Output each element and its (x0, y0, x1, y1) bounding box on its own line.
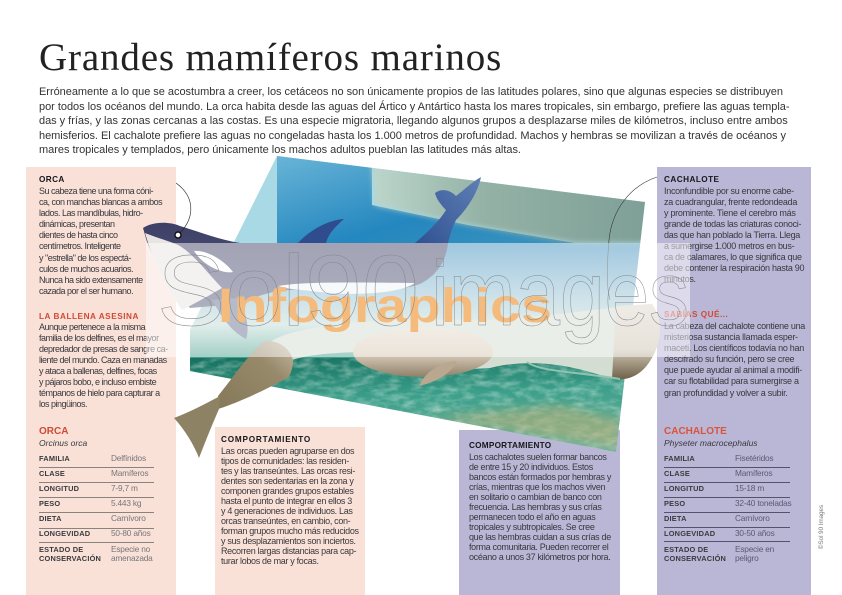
title: Grandes mamíferos marinos (39, 36, 502, 79)
fact table: cachalote: ESTADO DE (664, 545, 708, 554)
text: orca: centímetros. Inteligente (39, 241, 121, 251)
cachalote description (664, 175, 804, 284)
fact table: orca: DIETA (39, 514, 62, 523)
text: orca: cazada por el ser humano. (39, 286, 133, 296)
text: cachalote: ca de calamares, lo que significa que (664, 252, 802, 262)
text: comportamiento cachalote: crías, mientras que los machos viven (469, 482, 605, 492)
whale lower jaw (527, 362, 620, 379)
text: cachalote: minutos. (664, 274, 696, 284)
heading: la ballena asesina: LA BALLENA ASESINA (39, 312, 139, 321)
fact table: cachalote: LONGEVIDAD (664, 529, 715, 538)
text: sabías que: misteriosa sustancia llamada esper- (664, 332, 798, 342)
fact table: orca: Mamíferos (111, 468, 148, 478)
text: sabías que: gran profundidad y volver a subir. (664, 388, 788, 398)
whale flukes (174, 396, 220, 458)
text: la ballena asesina: los pingüinos. (39, 399, 87, 409)
connector: cachalote (607, 177, 657, 300)
fact table: cachalote: 30-50 años (735, 528, 775, 538)
text: la ballena asesina: familia de los delfines, es el mayor (39, 333, 159, 343)
text: la ballena asesina: y ataca a ballenas, delfines, focas (39, 366, 157, 376)
text: cachalote: debe contener la respiración hasta 90 (664, 263, 804, 273)
text: comportamiento cachalote (469, 452, 612, 562)
orca description (39, 175, 162, 296)
fact table: orca: 7-9,7 m (111, 483, 138, 493)
text: orca (39, 186, 162, 296)
watermark band (146, 243, 690, 357)
text: comportamiento orca: y sus desplazamientos son inciertos. (221, 536, 356, 546)
text: orca: Su cabeza tiene una forma cóni- (39, 186, 153, 196)
comportamiento orca (221, 435, 359, 566)
text: orca: ca, con manchas blancas a ambos (39, 197, 162, 207)
orca back (143, 223, 448, 308)
fact table: cachalote (664, 426, 792, 563)
text: cachalote: a sumergirse 1.000 metros en bus- (664, 241, 794, 251)
text: orca: culos de muchos acuarios. (39, 264, 133, 274)
text: comportamiento orca: hasta el punto de integrar en ellos 3 (221, 496, 352, 506)
text: cachalote: y prominente. Tiene el cerebro más (664, 208, 796, 218)
fact table: cachalote: CONSERVACIÓN (664, 554, 726, 563)
intro text: por todos los océanos del mundo. La orca habita desde las aguas del Ártico y Antártico hasta los mares tropicales, sin embargo, prefiere las aguas templa- (39, 100, 790, 112)
fact table: orca: LONGEVIDAD (39, 529, 90, 538)
panel: comportamiento cachalote background (459, 430, 620, 595)
fact table: orca: PESO (39, 499, 60, 508)
connector: orca (176, 183, 191, 233)
text: la ballena asesina: Aunque pertenece a la misma (39, 322, 145, 332)
text: cachalote: Inconfundible por su enorme cabe- (664, 186, 794, 196)
whale tail stock (218, 341, 293, 409)
text: sabías que: descifrado su función, pero se cree (664, 354, 794, 364)
grey green water (372, 160, 655, 243)
deep blue water (277, 150, 575, 243)
heading: cachalote: CACHALOTE (664, 175, 719, 184)
fact table: orca: Carnívoro (111, 513, 146, 523)
fact table: cachalote: Mamíferos (735, 468, 772, 478)
fact table: cachalote: LONGITUD (664, 484, 704, 493)
sabías que (664, 310, 806, 398)
sperm whale (174, 304, 660, 458)
orca eye patch (194, 251, 233, 272)
orca chest (145, 233, 222, 310)
text: orca: dientes de hasta cinco (39, 230, 118, 240)
text: sabías que: La cabeza del cachalote contiene una (664, 321, 805, 331)
text: orca: Nunca ha sido extensamente (39, 275, 143, 285)
text: la ballena asesina (39, 322, 168, 409)
text: comportamiento orca (221, 446, 359, 566)
text: comportamiento orca: tipos de comunidades: las residen- (221, 456, 349, 466)
comportamiento cachalote (469, 441, 612, 562)
orca flippers (212, 298, 248, 339)
water block (180, 150, 660, 460)
text: comportamiento cachalote: que las hembras cuidan a sus crías de (469, 532, 611, 542)
fact table: cachalote: Fisetéridos (735, 453, 773, 463)
intro text: das y frías, y las zonas cercanas a las costas. Es una especie migratoria, llegando algunos grupos a desplazarse miles de kilómetros, incluso entre ambos (39, 115, 788, 127)
panel: orca background (26, 167, 176, 595)
whale flipper (419, 361, 457, 386)
fact table: orca: amenazada (111, 553, 153, 563)
text: sabías que: que puede ayudar al animal a modifi- (664, 365, 802, 375)
heading: orca: ORCA (39, 175, 65, 184)
fact table: orca: Delfínidos (111, 453, 146, 463)
text: comportamiento cachalote: tropicales y subtropicales. Se cree (469, 522, 595, 532)
whale body (270, 304, 660, 379)
text: comportamiento cachalote: frecuencia. Las hembras y sus crías (469, 502, 602, 512)
fact table: orca: CONSERVACIÓN (39, 554, 101, 563)
marker: orca (175, 232, 181, 238)
text: la ballena asesina: témpanos de hielo para capturar a (39, 388, 160, 398)
text: comportamiento orca: turar lobos de mar y focas. (221, 556, 319, 566)
whale midsection (353, 327, 493, 377)
heading: sabías que: SABÍAS QUÉ... (664, 310, 728, 319)
intro text: mares tropicales y templados, pero únicamente los machos adultos pueblan las latitudes más altas. (39, 144, 521, 156)
text: sabías que: maceti. Los científicos todavía no han (664, 343, 804, 353)
heading: comportamiento: COMPORTAMIENTO (221, 435, 311, 444)
text: comportamiento cachalote: de entre 15 y 20 individuos. Estos (469, 462, 593, 472)
text: orca: lados. Las mandíbulas, hidro- (39, 208, 143, 218)
text: comportamiento orca: y 4 generaciones de individuos. Las (221, 506, 353, 516)
text: comportamiento orca: tes y las transeúntes. Las orcas resi- (221, 466, 355, 476)
sea floor (190, 358, 624, 452)
fact table: cachalote: CLASE (664, 469, 690, 478)
text: comportamiento cachalote: en solitario o cambian de banco con (469, 492, 602, 502)
la ballena asesina (39, 312, 168, 409)
text: comportamiento cachalote: forma comunitaria. Pueden recorrer el (469, 542, 608, 552)
fact table: cachalote: peligro (735, 553, 759, 563)
text: cachalote: za cuadrangular, frente redondeada (664, 197, 797, 207)
text: comportamiento orca: dentes son sedentarias en la zona y (221, 476, 354, 486)
text: comportamiento orca: Las orcas pueden agruparse en dos (221, 446, 354, 456)
intro text (39, 86, 790, 156)
text: la ballena asesina: y pájaros bobo, e incluso embiste (39, 377, 156, 387)
fact table: cachalote: PESO (664, 499, 685, 508)
text: sabías que (664, 321, 806, 398)
fact table: orca: Especie no (111, 544, 150, 554)
fact table: orca (39, 426, 154, 563)
fact table: orca: FAMILIA (39, 454, 70, 463)
orca tail (415, 177, 481, 252)
fact table: orca: LONGITUD (39, 484, 79, 493)
watermark: sol90images: images (431, 243, 689, 345)
fact table: cachalote: 32-40 toneladas (735, 498, 792, 508)
text: comportamiento cachalote: océano a unos 37 kilómetros por hora. (469, 552, 610, 562)
watermark: sol90images (157, 235, 689, 347)
fact table: cachalote: Especie en (735, 544, 774, 554)
text: comportamiento cachalote: Los cachalotes suelen formar bancos (469, 452, 607, 462)
text: comportamiento orca: forman grupos mucho más reducidos (221, 526, 359, 536)
orca belly (278, 282, 415, 294)
intro text: Erróneamente a lo que se acostumbra a creer, los cetáceos no son únicamente propios de las latitudes polares, sino que algunas especies se distribuyen (39, 86, 783, 98)
text: comportamiento orca: orcas transeúntes, en cambio, con- (221, 516, 350, 526)
fact table: cachalote: DIETA (664, 514, 687, 523)
species name: Orcinus orca (39, 438, 87, 448)
panel: cachalote background (657, 167, 811, 595)
fact table: orca: 5.443 kg (111, 498, 141, 508)
text: cachalote (664, 186, 804, 284)
species name: Physeter macrocephalus (664, 438, 758, 448)
text: comportamiento cachalote: bancos están formados por hembras y (469, 472, 611, 482)
text: cachalote: grande de todas las criaturas conoci- (664, 219, 801, 229)
text: la ballena asesina: depredador de presas de sangre ca- (39, 344, 168, 354)
fact table: orca: ESTADO DE (39, 545, 83, 554)
sand edge (430, 405, 622, 448)
orca (143, 177, 481, 339)
fact table: cachalote: Carnívoro (735, 513, 770, 523)
watermark: sol90images: Sol90 (157, 235, 419, 347)
text: sabías que: car su flotabilidad para sumergirse a (664, 376, 799, 386)
text: orca: y "estrella" de los espectá- (39, 253, 131, 263)
heading: cachalote: CACHALOTE (664, 426, 727, 437)
text: cachalote: das que han poblado la Tierra. Llega (664, 230, 800, 240)
credit: ©Sol 90 Images (818, 505, 825, 549)
text: la ballena asesina: liente del mundo. Caza en manadas (39, 355, 167, 365)
text: comportamiento orca: Recorren largas distancias para cap- (221, 546, 356, 556)
heading: comportamiento: COMPORTAMIENTO (469, 441, 551, 450)
fact table: cachalote: 15-18 m (735, 483, 764, 493)
text: comportamiento orca: componen grandes grupos estables (221, 486, 354, 496)
fact table: orca: 50-80 años (111, 528, 151, 538)
whale head beyond water (612, 304, 660, 379)
panel: comportamiento orca background (215, 427, 365, 595)
text: orca: dinámicas, presentan (39, 219, 115, 229)
orca dorsal fin (298, 219, 344, 243)
fact table: cachalote: FAMILIA (664, 454, 695, 463)
intro text: hemisferios. El cachalote prefiere las aguas no congeladas hasta los 1.000 metros de profundidad. Machos y hembras se movilizan a través de océanos y (39, 130, 786, 142)
text: comportamiento cachalote: permanecen todo el año en aguas (469, 512, 595, 522)
fact table: orca: CLASE (39, 469, 65, 478)
watermark: infographics: Infographics (218, 280, 552, 333)
illustration: whales in water block (143, 156, 660, 458)
heading: orca: ORCA (39, 426, 68, 437)
